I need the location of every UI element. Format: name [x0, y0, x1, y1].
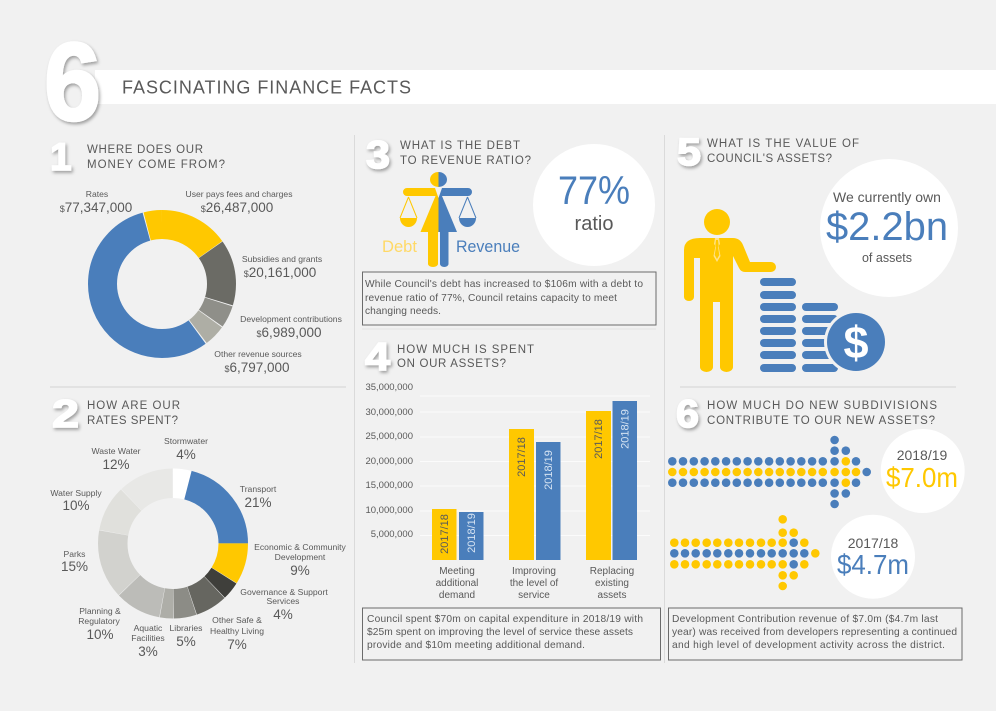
callout: $7.0m [881, 429, 965, 513]
label: waste water: Waste Water [91, 446, 141, 456]
label: parks: Parks [64, 549, 85, 559]
callout: $2.2bn: of assets [862, 251, 912, 265]
heading 6: HOW MUCH DO NEW SUBDIVISIONS [707, 400, 937, 412]
bar chart: asset spending: existing [595, 578, 629, 589]
number 3: 3 [366, 134, 390, 177]
heading 1 [87, 144, 225, 171]
bar chart: asset spending: additional [436, 578, 478, 589]
bar chart: asset spending: 2017/18 [593, 419, 605, 459]
text box: development contributions [668, 608, 962, 660]
label: revenue: Revenue [456, 237, 520, 256]
donut chart: rates spending [113, 483, 233, 604]
callout: $4.7m: $4.7m [837, 549, 909, 580]
bar chart: asset spending: 2018/19 [466, 513, 478, 553]
icon: justice figure with scales [400, 172, 476, 267]
label: libraries: 5% [176, 634, 196, 649]
title banner [44, 21, 996, 144]
bar chart: asset spending: 30,000,000 [365, 407, 413, 418]
label: parks: 15% [61, 559, 88, 574]
bar chart: asset spending: 10,000,000 [365, 505, 413, 516]
heading 4: ON OUR ASSETS? [397, 358, 506, 370]
callout: $2.2bn: $2.2bn [826, 205, 948, 249]
text box: debt summary: revenue ratio of 77%, Council retains capacity to meet [365, 293, 617, 304]
icon: coin stacks with dollar: $ [843, 317, 869, 368]
number 4: 4 [365, 336, 390, 379]
panel: subdivisions contribution [668, 393, 965, 660]
label: aquatic facilities [131, 623, 165, 659]
bar chart: asset spending: 25,000,000 [365, 431, 413, 442]
label: planning: Regulatory [78, 616, 120, 626]
panel: debt to revenue ratio [362, 134, 656, 325]
label: transport: 21% [244, 495, 272, 510]
label: stormwater: 4% [176, 447, 196, 462]
label: user pays: $26,487,000 [201, 200, 273, 215]
callout: $2.2bn: We currently own [833, 189, 941, 205]
bar chart: asset spending: service [518, 590, 550, 601]
label: planning [78, 606, 121, 642]
label: planning: Planning & [79, 606, 121, 616]
label: aquatic facilities: 3% [138, 644, 158, 659]
number 5: 5 [677, 131, 701, 174]
label: debt: Debt [382, 237, 417, 256]
label: stormwater: Stormwater [164, 436, 208, 446]
donut chart: revenue sources [102, 224, 222, 344]
label: other safe: Healthy Living [210, 626, 264, 636]
bar chart: asset spending: demand [439, 590, 475, 601]
text box: capital expenditure: provide and $10m meeting additional demand. [367, 640, 585, 651]
label: other revenue [214, 349, 302, 375]
label: other revenue: $6,797,000 [224, 360, 290, 375]
dot arrow 2018/19 [668, 436, 871, 508]
label: development contributions: $6,989,000 [256, 325, 322, 340]
panel: how are our rates spent [50, 393, 347, 659]
bar chart: asset spending: 5,000,000 [371, 529, 413, 540]
label: other revenue: Other revenue sources [214, 349, 302, 359]
label: subsidies [242, 254, 322, 280]
heading 5: COUNCIL'S ASSETS? [707, 153, 832, 165]
panel: value of assets [677, 131, 958, 374]
text box: debt summary [362, 272, 656, 325]
callout: 77% ratio [533, 144, 655, 266]
text box: development contributions: and high level of development activity across the district. [672, 640, 945, 651]
heading 3: TO REVENUE RATIO? [400, 155, 531, 167]
bar chart: asset spending: Improving [512, 566, 556, 577]
label: stormwater [164, 436, 208, 462]
label: economic development: Economic & Community [254, 542, 347, 552]
bar chart: asset spending: 35,000,000 [365, 382, 413, 393]
label: user pays: User pays fees and charges [185, 189, 293, 199]
callout: $4.7m [831, 515, 915, 599]
heading 4 [397, 344, 534, 370]
label: governance: Governance & Support [240, 587, 328, 597]
label: subsidies: Subsidies and grants [242, 254, 322, 264]
label: aquatic facilities: Facilities [131, 633, 165, 643]
callout: $7.0m: 2018/19 [897, 447, 948, 463]
heading 2: HOW ARE OUR [87, 400, 180, 412]
callout: 77% ratio: ratio [575, 213, 613, 235]
label: libraries: Libraries [170, 623, 202, 633]
label: development contributions [240, 314, 342, 340]
label: parks [61, 549, 88, 574]
label: rates: $77,347,000 [60, 200, 132, 215]
callout: 77% ratio: 77% [558, 169, 630, 213]
label: subsidies: $20,161,000 [244, 265, 316, 280]
heading 5: WHAT IS THE VALUE OF [707, 138, 859, 150]
label: transport [240, 484, 277, 510]
label: other safe: Other Safe & [212, 615, 262, 625]
label: libraries [170, 623, 202, 649]
number 2: 2 [52, 393, 79, 436]
label: waste water [91, 446, 141, 472]
label: planning: 10% [86, 627, 114, 642]
text box: capital expenditure: Council spent $70m on capital expenditure in 2018/19 with [367, 614, 643, 625]
text box: capital expenditure [362, 608, 660, 660]
dot arrow 2017/18 [670, 515, 820, 590]
heading 5 [707, 138, 859, 165]
panel: spending on assets [362, 336, 660, 660]
label: other safe: 7% [227, 637, 247, 652]
icon: coin stacks with dollar [760, 278, 888, 374]
number 6: 6 [676, 393, 699, 436]
label: governance: 4% [273, 607, 293, 622]
bar chart: asset spending: Replacing [590, 566, 634, 577]
bar chart: asset spending: Meeting [439, 566, 475, 577]
label: waste water: 12% [102, 457, 130, 472]
panel: where does our money come from [50, 136, 342, 375]
label: other safe [210, 615, 264, 652]
label: aquatic facilities: Aquatic [134, 623, 163, 633]
label: economic development: 9% [290, 563, 310, 578]
callout: $4.7m: 2017/18 [848, 535, 899, 551]
label: development contributions: Development contributions [240, 314, 342, 324]
label: governance [240, 587, 328, 622]
label: rates: Rates [86, 189, 108, 199]
label: water supply [50, 488, 102, 513]
title: FASCINATING FINANCE FACTS [122, 78, 411, 98]
heading 3: WHAT IS THE DEBT [400, 140, 520, 152]
callout: $2.2bn [820, 159, 958, 297]
number 1: 1 [50, 136, 72, 179]
text box: debt summary: While Council's debt has increased to $106m with a debt to [365, 279, 643, 290]
bar chart: asset spending: 2018/19 [543, 450, 555, 490]
label: economic development [254, 542, 347, 578]
bar chart: asset spending: 2017/18 [439, 514, 451, 554]
heading 1: WHERE DOES OUR [87, 144, 203, 156]
text box: development contributions: year) was received from developers representing a continued [672, 627, 957, 638]
label: governance: Services [267, 596, 299, 606]
bar chart: asset spending: 2018/19 [620, 409, 632, 449]
text box: debt summary: changing needs. [365, 306, 441, 317]
heading 2 [87, 400, 180, 427]
text box: capital expenditure: $25m spent on improving the level of service these assets [367, 627, 633, 638]
heading 6: CONTRIBUTE TO OUR NEW ASSETS? [707, 415, 935, 427]
heading 3 [400, 140, 531, 167]
bar chart: asset spending: 20,000,000 [365, 456, 413, 467]
bar chart: asset spending [365, 382, 650, 601]
label: rates [60, 189, 132, 215]
heading 6 [707, 400, 937, 427]
label: water supply: 10% [62, 498, 90, 513]
bar chart: asset spending: 2017/18 [516, 437, 528, 477]
callout: $7.0m: $7.0m [886, 462, 958, 493]
label: user pays [185, 189, 293, 215]
label: transport: Transport [240, 484, 277, 494]
big number 6: 6 [44, 21, 101, 144]
bar chart: asset spending: 15,000,000 [365, 480, 413, 491]
icon: business person [684, 209, 776, 372]
heading 1: MONEY COME FROM? [87, 159, 225, 171]
bar chart: asset spending: the level of [510, 578, 558, 589]
label: water supply: Water Supply [50, 488, 102, 498]
text box: development contributions: Development Contribution revenue of $7.0m ($4.7m last [672, 614, 938, 625]
heading 2: RATES SPENT? [87, 415, 178, 427]
bar chart: asset spending: assets [598, 590, 626, 601]
label: economic development: Development [275, 552, 326, 562]
heading 4: HOW MUCH IS SPENT [397, 344, 534, 356]
